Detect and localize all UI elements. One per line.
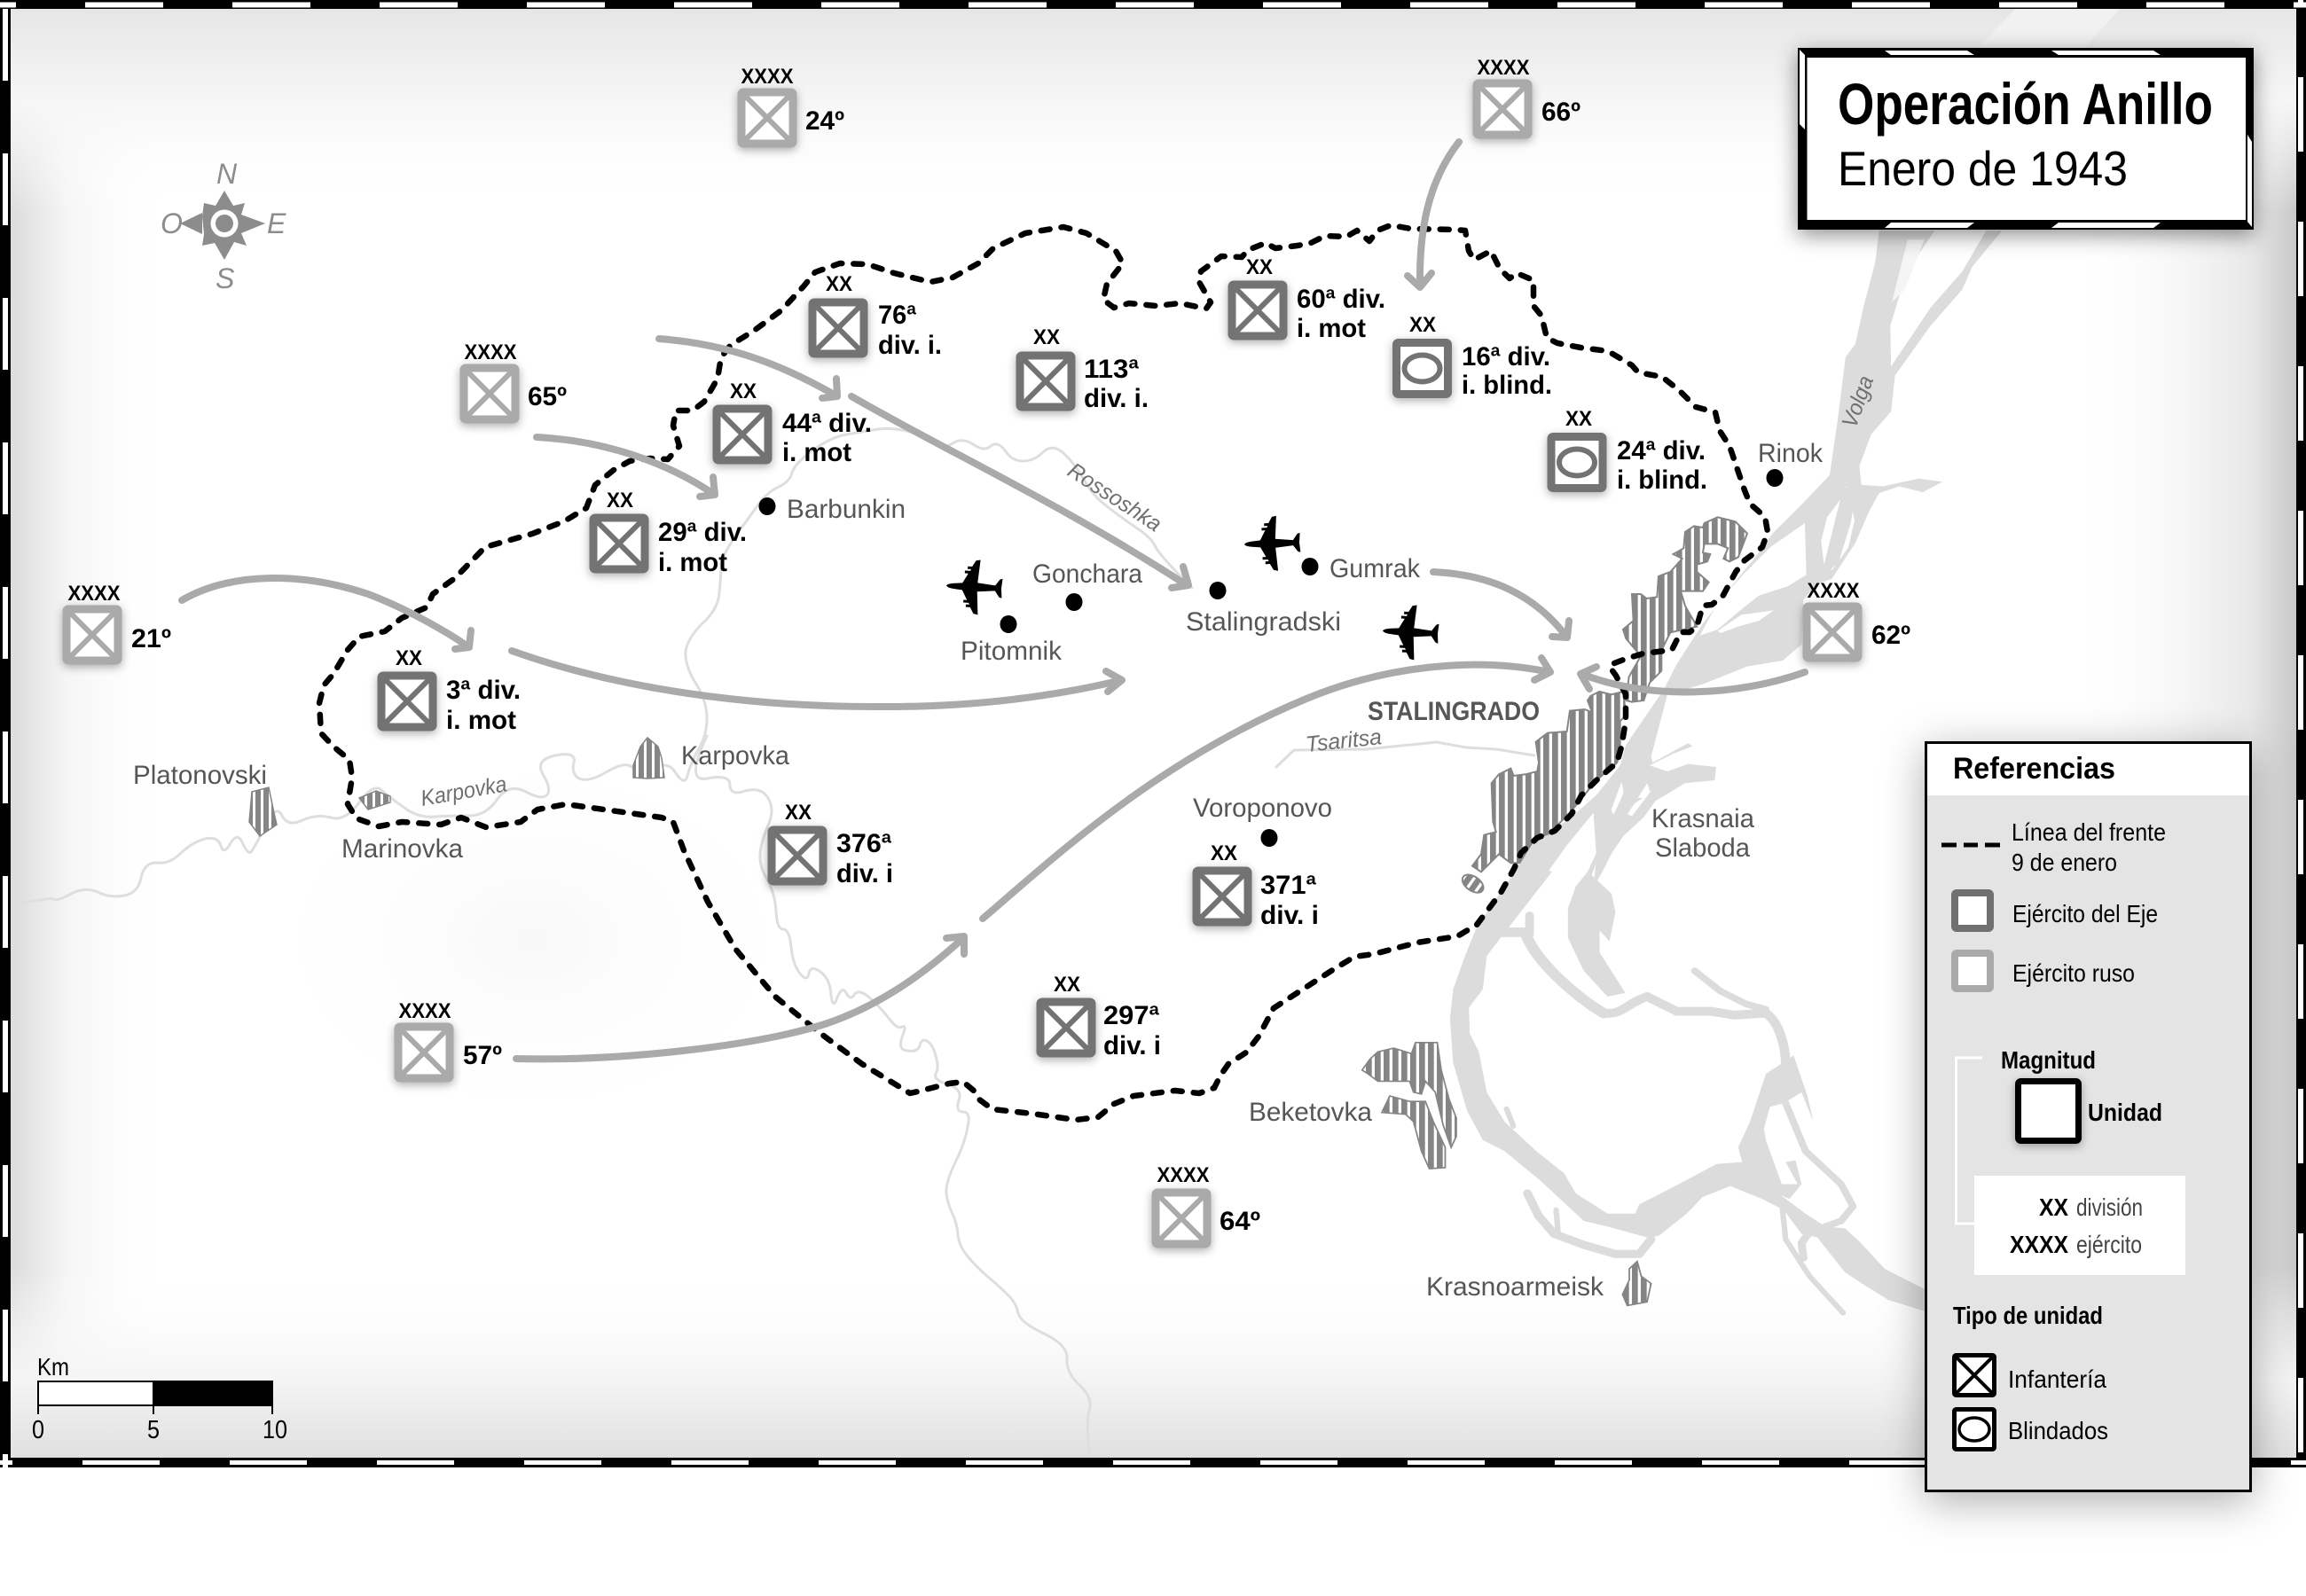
unit: 371st infantry division: XX: [1211, 841, 1237, 865]
unit: 16th armoured division: 16ª div.: [1462, 342, 1550, 372]
legend: unit size key: XXXX: [2010, 1231, 2068, 1258]
unit: 297th infantry division: div. i: [1103, 1031, 1161, 1060]
arrow: 57th army advance: [516, 936, 964, 1059]
unit: 16th armoured division: [1396, 313, 1552, 400]
unit: 64th army: 64º: [1220, 1207, 1260, 1236]
place names: Gumrak: [1329, 554, 1421, 583]
unit: 44th motorised infantry division: 44ª div.: [782, 409, 872, 438]
legend: unit size key: Magnitud: [2001, 1046, 2096, 1074]
unit: 113th infantry division: [1020, 325, 1149, 413]
unit: 29th motorised infantry division: [593, 489, 747, 577]
compass rose: N: [216, 158, 238, 190]
river names: Volga: [1837, 372, 1879, 431]
airplanes: [945, 515, 1440, 661]
unit: 371st infantry division: 371ª: [1260, 871, 1317, 900]
legend heading: Referencias: [1953, 752, 2115, 786]
arrow: 62nd army westward: [1580, 667, 1805, 692]
unit: 64th army: [1156, 1163, 1260, 1244]
place names: Platonovski: [133, 761, 267, 790]
cities: Beketovka and Krasnoarmeisk: [1362, 1043, 1651, 1305]
unit: 24th armoured division: XX: [1565, 407, 1592, 431]
river names: Rossoshka: [1063, 458, 1166, 536]
compass rose: S: [216, 262, 234, 294]
city: Stalingrado: [1459, 517, 1747, 896]
compass rose: [161, 158, 286, 294]
legend: unit size key: ejército: [2076, 1231, 2142, 1258]
town dots: [759, 469, 1783, 847]
scale bar: 5: [147, 1416, 160, 1444]
unit: 62nd army: 62º: [1871, 621, 1910, 650]
title box: [1798, 48, 2254, 230]
compass rose: O: [161, 207, 183, 239]
unit: 376th infantry division: 376ª: [836, 829, 892, 858]
unit: 76th infantry division: [812, 272, 942, 360]
unit: 57th army: [398, 999, 502, 1078]
unit: 24th armoured division: [1551, 407, 1707, 495]
unit: 44th motorised infantry division: i. mot: [782, 438, 851, 467]
legend: unit type key: Blindados: [2008, 1417, 2108, 1444]
arrow: south-west advance into Stalingrad: [983, 658, 1550, 919]
unit: 297th infantry division: XX: [1054, 973, 1080, 997]
legend: Axis army: [1955, 893, 2158, 928]
unit: 76th infantry division: 76ª: [878, 301, 917, 330]
unit: 21st army: 21º: [131, 624, 171, 653]
river Volga: [1450, 9, 2120, 1313]
place names: Slaboda: [1655, 833, 1750, 863]
unit: 3rd motorised infantry division: i. mot: [446, 706, 516, 735]
legend: Russian army: Ejército ruso: [2012, 959, 2135, 987]
unit: 62nd army: [1807, 579, 1910, 658]
unit: 3rd motorised infantry division: [381, 646, 521, 735]
unit: 297th infantry division: [1040, 973, 1161, 1060]
unit: 76th infantry division: XX: [826, 272, 852, 296]
legend: unit size key: división: [2076, 1193, 2143, 1221]
unit: 24th army: XXXX: [741, 65, 793, 89]
legend: unit type key: Tipo de unidad: [1953, 1302, 2103, 1329]
legend: unit type key: Infantería: [2008, 1365, 2106, 1393]
unit: 29th motorised infantry division: 29ª div.: [658, 518, 747, 547]
unit: 57th army: 57º: [463, 1041, 502, 1070]
unit: 371st infantry division: div. i: [1260, 901, 1319, 930]
unit: 376th infantry division: XX: [785, 801, 812, 825]
place names: STALINGRADO: [1368, 697, 1540, 726]
legend: Russian army: [1955, 953, 2135, 989]
river names: Tsaritsa: [1305, 724, 1383, 757]
legend: unit size key: XX: [2039, 1193, 2068, 1221]
place names: Beketovka: [1249, 1098, 1372, 1127]
place names: Barbunkin: [787, 495, 906, 524]
unit: 44th motorised infantry division: [717, 379, 872, 467]
unit: 66th army: 66º: [1541, 98, 1580, 127]
unit: 21st army: XXXX: [67, 582, 121, 606]
unit: 65th army: [464, 340, 567, 419]
towns: Platonovski, Marinovka, Karpovka: [249, 738, 664, 836]
place names: Stalingradski: [1186, 607, 1341, 637]
scale bar: 0: [32, 1416, 44, 1444]
arrow: north-west advance: [659, 339, 837, 398]
unit: 16th armoured division: i. blind.: [1462, 371, 1552, 400]
arrow: Gumrak to Stalingrad: [1433, 572, 1569, 638]
place names: Krasnoarmeisk: [1426, 1272, 1604, 1302]
legend panel: [1926, 743, 2251, 1491]
legend: front line: [1941, 818, 2166, 876]
unit: 60th motorised infantry division: [1232, 255, 1385, 343]
unit: 16th armoured division: XX: [1409, 313, 1436, 337]
unit: 76th infantry division: div. i.: [878, 331, 942, 360]
place names: Krasnaia: [1651, 804, 1754, 833]
place names: Pitomnik: [961, 637, 1063, 666]
river names: Karpovka: [419, 771, 509, 811]
arrow: advance toward Stalingradski: [851, 396, 1188, 588]
subtitle: Enero de 1943: [1838, 141, 2128, 196]
place names: Voroponovo: [1193, 794, 1332, 823]
place names: Gonchara: [1032, 559, 1142, 589]
unit: 371st infantry division: [1196, 841, 1319, 930]
unit: 24th army: [741, 65, 844, 144]
place names: [133, 439, 1824, 1302]
unit: 66th army: [1477, 56, 1580, 135]
unit: 60th motorised infantry division: i. mot: [1297, 314, 1366, 343]
unit: 65th army: XXXX: [465, 340, 516, 364]
arrow: long advance toward Pitomnik: [512, 651, 1122, 707]
unit: 60th motorised infantry division: XX: [1246, 255, 1273, 279]
unit: 113th infantry division: 113ª: [1084, 355, 1140, 384]
unit: 60th motorised infantry division: 60ª div.: [1297, 285, 1385, 314]
unit: 65th army: 65º: [528, 382, 567, 411]
legend: front line: Línea del frente: [2012, 818, 2166, 846]
arrow: 66th army southward: [1408, 142, 1459, 287]
unit: 24th armoured division: i. blind.: [1617, 466, 1707, 495]
unit: 64th army: XXXX: [1157, 1163, 1210, 1187]
front line, 9 January: [319, 225, 1768, 1120]
place names: Rinok: [1758, 439, 1824, 468]
legend: unit type key: [1953, 1302, 2108, 1449]
legend: unit size key: Unidad: [2088, 1099, 2162, 1126]
legend: Axis army: Ejército del Eje: [2012, 900, 2158, 927]
unit: 113th infantry division: XX: [1033, 325, 1060, 349]
unit: 113th infantry division: div. i.: [1084, 384, 1149, 413]
unit: 66th army: XXXX: [1478, 56, 1529, 80]
arrow: 65th army short advance: [537, 437, 715, 497]
unit: 24th armoured division: 24ª div.: [1617, 436, 1706, 466]
river names: [419, 372, 1879, 811]
scale bar: Km: [37, 1353, 69, 1381]
compass rose: E: [267, 207, 286, 239]
unit: 62nd army: XXXX: [1808, 579, 1859, 603]
place names: Marinovka: [341, 834, 463, 864]
title heading: Operación Anillo: [1838, 71, 2213, 137]
unit: 29th motorised infantry division: XX: [607, 489, 633, 512]
unit: 44th motorised infantry division: XX: [730, 379, 757, 403]
unit: 3rd motorised infantry division: 3ª div.: [446, 676, 521, 705]
unit: 376th infantry division: [772, 801, 893, 888]
unit: 57th army: XXXX: [399, 999, 451, 1023]
unit: 376th infantry division: div. i: [836, 859, 893, 888]
unit: 29th motorised infantry division: i. mot: [658, 548, 727, 577]
legend: front line: 9 de enero: [2012, 849, 2117, 876]
scale bar: 10: [263, 1416, 287, 1444]
scale bar: [32, 1353, 287, 1444]
arrow: 21st army advance: [182, 578, 471, 649]
unit: 24th army: 24º: [805, 106, 844, 136]
thin rivers: Karpovka, Rossoshka, Tsaritsa: [14, 428, 1534, 1456]
place names: Karpovka: [681, 741, 789, 771]
unit: 3rd motorised infantry division: XX: [396, 646, 422, 670]
unit: 297th infantry division: 297ª: [1103, 1001, 1160, 1030]
legend: unit size key: [1957, 1046, 2185, 1275]
unit: 21st army: [67, 582, 171, 661]
